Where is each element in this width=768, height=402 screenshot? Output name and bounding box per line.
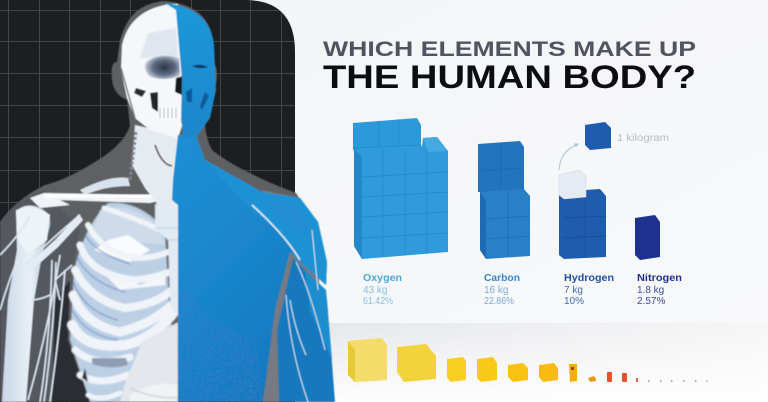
body silhouette halo [0, 1, 320, 402]
label: hydrogen: Hydrogen [564, 272, 614, 284]
left arm bones and nerves [0, 206, 83, 402]
sternum [155, 204, 179, 318]
abdomen organs [120, 322, 178, 402]
nitrogen cube stack [635, 215, 660, 260]
blue muscle arm [277, 230, 335, 402]
bottom band [300, 323, 768, 402]
label: carbon: 16 kg [484, 285, 508, 296]
arrow to single cube [559, 144, 579, 170]
label: nitrogen [637, 272, 682, 307]
ribcage and lungs [70, 203, 179, 402]
1 kilogram label: 1 kilogram [617, 132, 669, 144]
hydrogen cube stack [559, 170, 606, 259]
label: carbon: Carbon [484, 272, 520, 284]
dark area behind ribs and arm [0, 190, 80, 402]
title line 1: WHICH ELEMENTS MAKE UP [323, 38, 696, 61]
human body illustration [0, 1, 335, 402]
label: carbon: 22.86% [484, 296, 514, 307]
title [323, 38, 696, 95]
carbon cube stack [478, 141, 530, 259]
blue muscle half: torso and neck [172, 135, 327, 402]
white highlighted cube [559, 170, 586, 199]
label: oxygen: 61.42% [363, 296, 393, 307]
dark gaps between lower ribs [92, 358, 128, 367]
trace elements row of yellow cubes [348, 338, 708, 382]
label: nitrogen: Nitrogen [637, 272, 682, 284]
label: nitrogen: 1.8 kg [637, 285, 664, 296]
label: nitrogen: 2.57% [637, 296, 665, 307]
dark stipple patch, shoulder [262, 200, 312, 235]
label: carbon [484, 272, 520, 307]
label: hydrogen: 10% [564, 296, 584, 307]
oxygen cube stack [353, 118, 448, 259]
skull [121, 4, 184, 138]
dark stipple patch, lower chest [180, 290, 263, 402]
neck [132, 125, 178, 205]
blue muscle half: head [165, 3, 216, 138]
1 kilogram cube [585, 122, 611, 150]
label: oxygen: 43 kg [363, 285, 387, 296]
label: hydrogen: 7 kg [564, 285, 583, 296]
panel: dark grid background [0, 0, 295, 402]
label: hydrogen [564, 272, 614, 307]
label: oxygen: Oxygen [363, 272, 402, 284]
gap between torso and blue arm [262, 190, 320, 402]
label: oxygen [363, 272, 402, 307]
title line 2: THE HUMAN BODY? [323, 59, 696, 95]
collarbone [30, 193, 158, 208]
